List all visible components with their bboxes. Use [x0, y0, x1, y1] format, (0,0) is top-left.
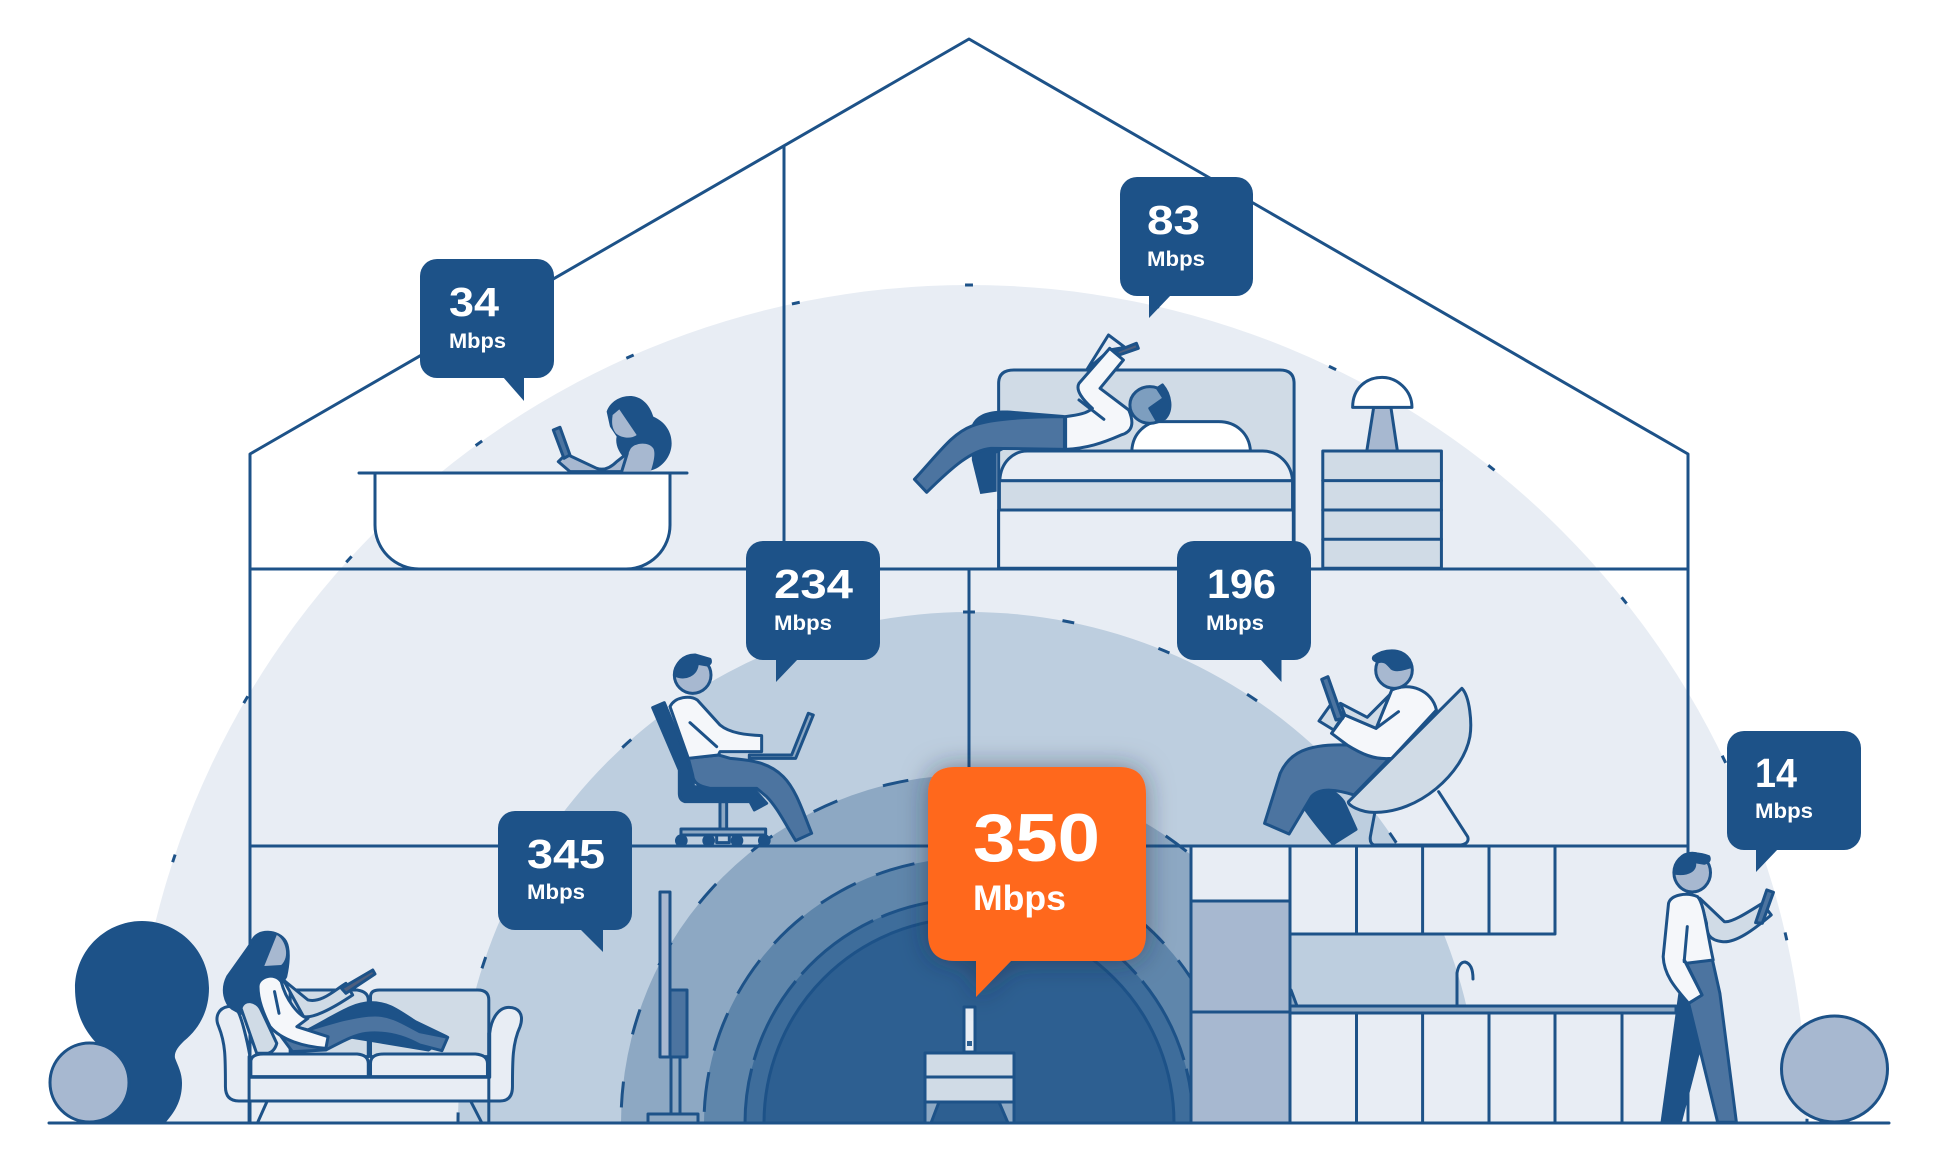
- callout: 234 Mbps: Mbps: [774, 612, 832, 635]
- callout: 34 Mbps: [420, 259, 554, 401]
- person lying on bed with phone: [914, 335, 1170, 494]
- callout: 34 Mbps: Mbps: [449, 330, 506, 353]
- callout: 14 Mbps: Mbps: [1755, 800, 1813, 823]
- person on office chair with laptop: [653, 655, 813, 847]
- bathtub: [359, 473, 687, 569]
- shrub right: [1782, 1016, 1888, 1122]
- router table: [925, 1053, 1014, 1123]
- signal coverage arcs: [131, 285, 1807, 1123]
- callout: 196 Mbps: 196: [1207, 561, 1276, 607]
- callout: 350 Mbps: Mbps: [973, 879, 1066, 918]
- callout: 345 Mbps: [498, 811, 632, 952]
- callout: 350 Mbps: 350: [973, 800, 1100, 876]
- callout: 14 Mbps: 14: [1755, 750, 1797, 796]
- callout: 196 Mbps: Mbps: [1206, 612, 1264, 635]
- callout: 234 Mbps: 234: [774, 561, 853, 607]
- callout: 83 Mbps: [1120, 177, 1253, 318]
- floor lamp / TV stand: [648, 892, 698, 1123]
- callout: 83 Mbps: 83: [1147, 197, 1200, 243]
- shrubs left: [50, 921, 209, 1123]
- callout: 196 Mbps: [1177, 541, 1311, 682]
- house outline: [250, 39, 1688, 1123]
- person on egg chair with tablet: [1265, 651, 1471, 845]
- person on sofa with phone: [224, 932, 448, 1053]
- standing person with phone: [1661, 853, 1773, 1122]
- callout: 234 Mbps: [746, 541, 880, 682]
- callout: 345 Mbps: 345: [527, 831, 605, 877]
- callout: 34 Mbps: 34: [449, 279, 499, 325]
- kitchen cabinets: [1191, 846, 1680, 1123]
- icon: router: [964, 1007, 975, 1052]
- floor line: [49, 1122, 1889, 1124]
- bed, nightstand and lamp: [999, 370, 1441, 568]
- person in bathtub with tablet: [553, 396, 672, 472]
- callout: 350 Mbps: [928, 767, 1146, 997]
- callout: 345 Mbps: Mbps: [527, 881, 585, 904]
- callout: 83 Mbps: Mbps: [1147, 248, 1205, 271]
- sofa: [217, 990, 521, 1123]
- callout: 14 Mbps: [1727, 731, 1861, 872]
